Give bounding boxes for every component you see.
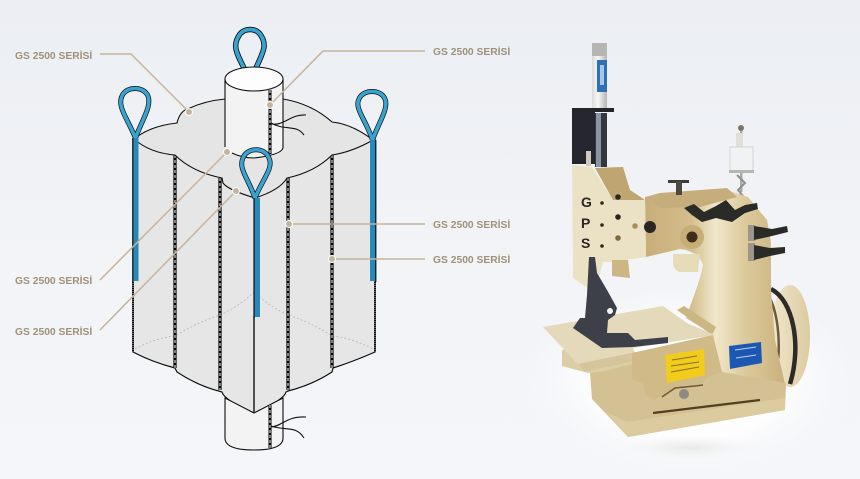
diagram: bulk bag [121,30,386,450]
floor reflection [610,434,770,462]
callout: top right [266,45,510,108]
top panel [134,99,373,198]
head details: G [581,194,592,210]
front strap and loop [242,150,270,318]
tension disc [680,225,704,249]
left plate underside [562,345,640,373]
top neck [225,79,306,158]
callout: right middle [286,218,510,231]
machine base [590,360,786,437]
tension knobs [684,200,788,261]
thumb screw [668,180,689,195]
oil cup [729,125,754,196]
head rear shade [595,167,645,200]
callouts [15,45,510,338]
callout: left middle: GS 2500 SERİSİ [15,274,92,287]
warning label [665,349,705,383]
callout: top left [15,49,192,116]
neck top ellipse [225,67,283,91]
top loop, behind neck top [236,30,264,68]
base lower lip [606,398,785,437]
adjustment screw [662,385,703,399]
bag body [133,139,375,413]
pillar base collar [677,306,716,335]
illustration: sewing machine [543,43,810,462]
blue nameplate [729,342,762,369]
callout: right lower [328,253,510,266]
callout: right lower: GS 2500 SERİSİ [433,253,510,266]
base groove [653,400,760,413]
callout: left lower [15,188,240,338]
bed plate front edge [578,352,638,372]
front cover [632,335,722,400]
callout: left middle [15,148,230,287]
presser foot [573,257,668,348]
vertical seams [133,155,375,412]
head details: S [581,235,590,251]
thread cylinder [592,43,607,108]
machine arm and pillar [645,190,785,384]
callout: left lower: GS 2500 SERİSİ [15,325,92,338]
bed top plate [543,306,715,372]
bracket and column [572,108,614,167]
machine head [572,165,646,288]
callout: top left: GS 2500 SERİSİ [15,49,92,62]
callout: top right: GS 2500 SERİSİ [433,45,510,58]
bobbin stub under arm [673,254,700,272]
left strap and loop [121,88,149,282]
handwheel [770,285,810,387]
callout: right middle: GS 2500 SERİSİ [433,218,510,231]
head details: P [581,215,590,231]
head underside foot [612,260,630,278]
arm top plate [645,188,737,208]
head details [581,194,656,251]
inner dotted base line [135,292,373,349]
right strap and loop [358,92,386,282]
bottom neck [225,398,306,450]
